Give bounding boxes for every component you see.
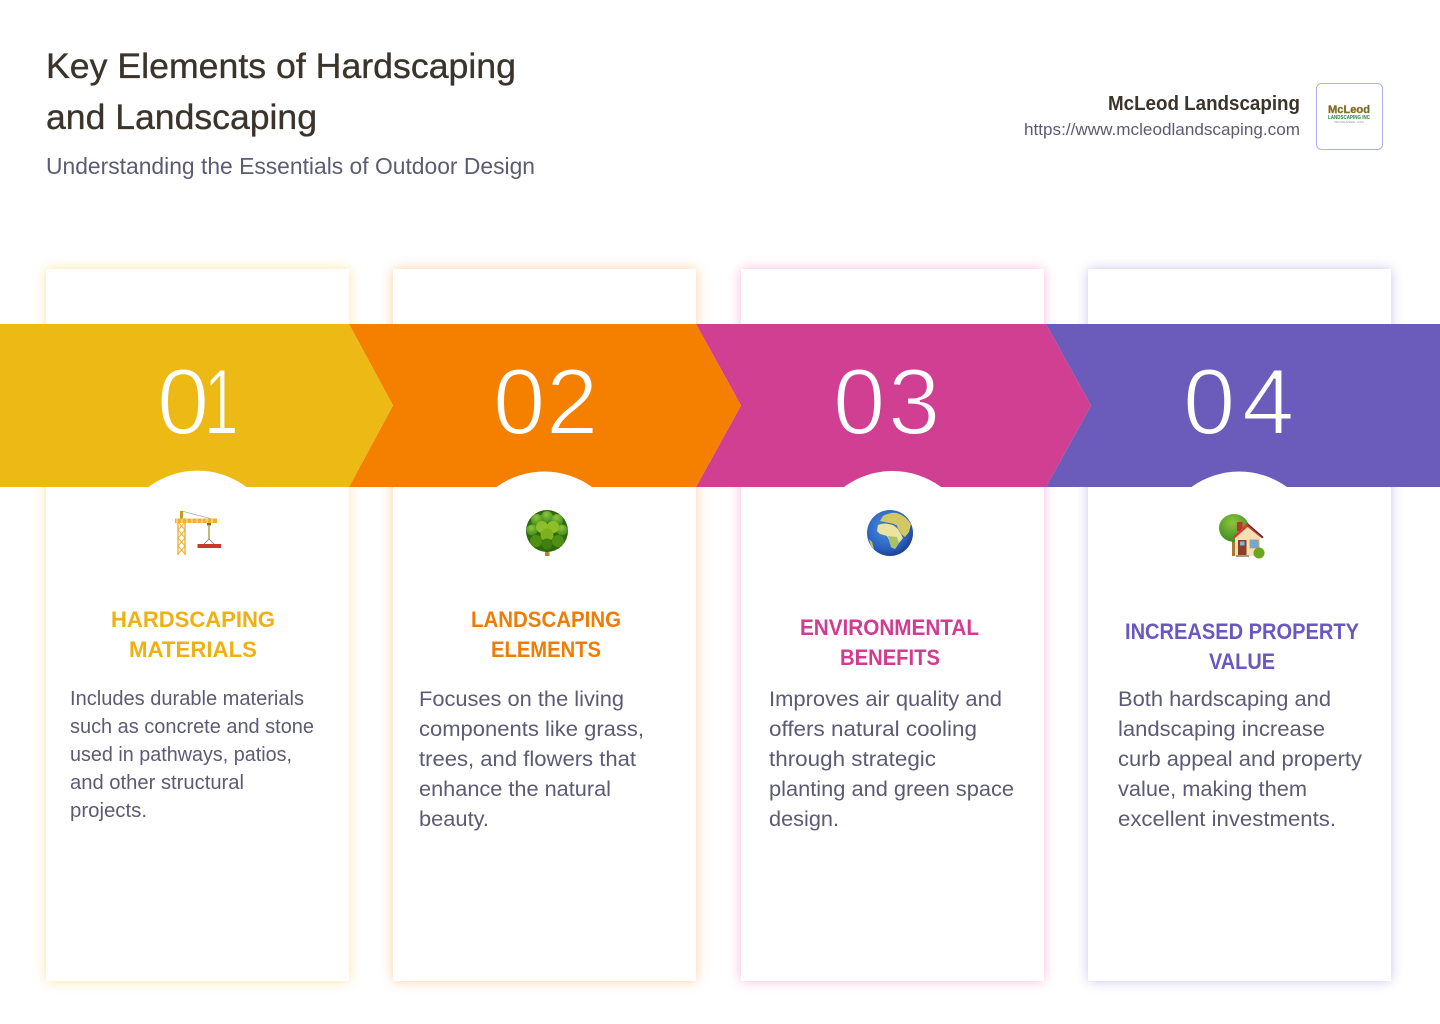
number 01: 1 — [204, 349, 239, 454]
title: and Landscaping — [46, 98, 317, 137]
text: hardscaping description: used in pathways, patios, — [70, 744, 292, 766]
logo: McLeod — [1328, 104, 1370, 116]
heading: landscaping elements — [471, 607, 621, 662]
panel: card 1 — [46, 269, 349, 981]
notch 2 — [496, 472, 592, 487]
heading: landscaping elements: LANDSCAPING — [471, 607, 621, 632]
text: hardscaping description: such as concrete and stone — [70, 716, 314, 738]
number 02: 02 — [493, 349, 598, 454]
text: hardscaping description: Includes durable materials — [70, 688, 304, 710]
heading: increased property value: VALUE — [1209, 649, 1275, 674]
arrow 3 — [696, 324, 1091, 487]
text: landscaping description — [419, 688, 644, 831]
icon: globe — [867, 510, 913, 556]
heading: hardscaping materials: MATERIALS — [129, 637, 257, 662]
text: landscaping description: components like grass, — [419, 718, 644, 741]
logo: TENNESSEE, USA — [1334, 120, 1364, 124]
text: landscaping description: beauty. — [419, 808, 489, 831]
notch 4 — [1192, 472, 1287, 487]
number 01 — [157, 349, 239, 454]
text: environmental description: design. — [769, 808, 839, 831]
panel: card 2 — [393, 269, 696, 981]
subtitle: Understanding the Essentials of Outdoor Design — [46, 153, 535, 179]
title: Key Elements of Hardscaping — [46, 47, 516, 86]
notch 1 — [148, 471, 246, 487]
heading: hardscaping materials — [111, 607, 275, 662]
text: hardscaping description: and other structural — [70, 772, 244, 794]
heading: environmental benefits: BENEFITS — [840, 645, 940, 670]
heading: hardscaping materials: HARDSCAPING — [111, 607, 275, 632]
text: environmental description: offers natural cooling — [769, 718, 977, 741]
number 01: 0 — [157, 349, 209, 454]
logo — [1316, 84, 1382, 150]
text: property value description: value, making them — [1118, 778, 1307, 801]
text: landscaping description: trees, and flowers that — [419, 748, 636, 771]
text: property value description: Both hardscaping and — [1118, 688, 1331, 711]
text: property value description: curb appeal and property — [1118, 748, 1363, 771]
heading: environmental benefits — [800, 615, 979, 670]
heading: increased property value: INCREASED PROPERTY — [1125, 619, 1359, 644]
text: landscaping description: enhance the natural — [419, 778, 611, 801]
text: property value description: landscaping increase — [1118, 718, 1325, 741]
number 03: 03 — [833, 349, 940, 454]
brand name and url — [1024, 93, 1300, 139]
text: environmental description: through strategic — [769, 748, 936, 771]
arrow 1 — [0, 324, 393, 487]
heading: environmental benefits: ENVIRONMENTAL — [800, 615, 979, 640]
icon: tree — [526, 510, 568, 556]
text: hardscaping description: projects. — [70, 800, 147, 822]
arrow 4 — [1046, 324, 1440, 487]
notch 3 — [844, 471, 941, 487]
heading: increased property value — [1125, 619, 1359, 674]
text: environmental description — [769, 688, 1014, 831]
text: environmental description: planting and green space — [769, 778, 1014, 801]
panel: card 4 — [1088, 269, 1391, 981]
text: hardscaping description — [70, 688, 314, 822]
icon: house with tree — [1219, 514, 1264, 558]
brand name and url: McLeod Landscaping — [1108, 93, 1300, 115]
logo: LANDSCAPING INC — [1328, 115, 1370, 121]
text: landscaping description: Focuses on the living — [419, 688, 624, 711]
text: property value description — [1118, 688, 1363, 831]
text: environmental description: Improves air quality and — [769, 688, 1002, 711]
brand name and url: https://www.mcleodlandscaping.com — [1024, 120, 1300, 139]
text: property value description: excellent investments. — [1118, 808, 1336, 831]
heading: landscaping elements: ELEMENTS — [491, 637, 601, 662]
arrow 2 — [349, 324, 741, 487]
panel: card 3 — [741, 269, 1044, 981]
icon: crane — [175, 511, 221, 555]
number 04: 04 — [1183, 349, 1294, 454]
title — [46, 47, 516, 137]
